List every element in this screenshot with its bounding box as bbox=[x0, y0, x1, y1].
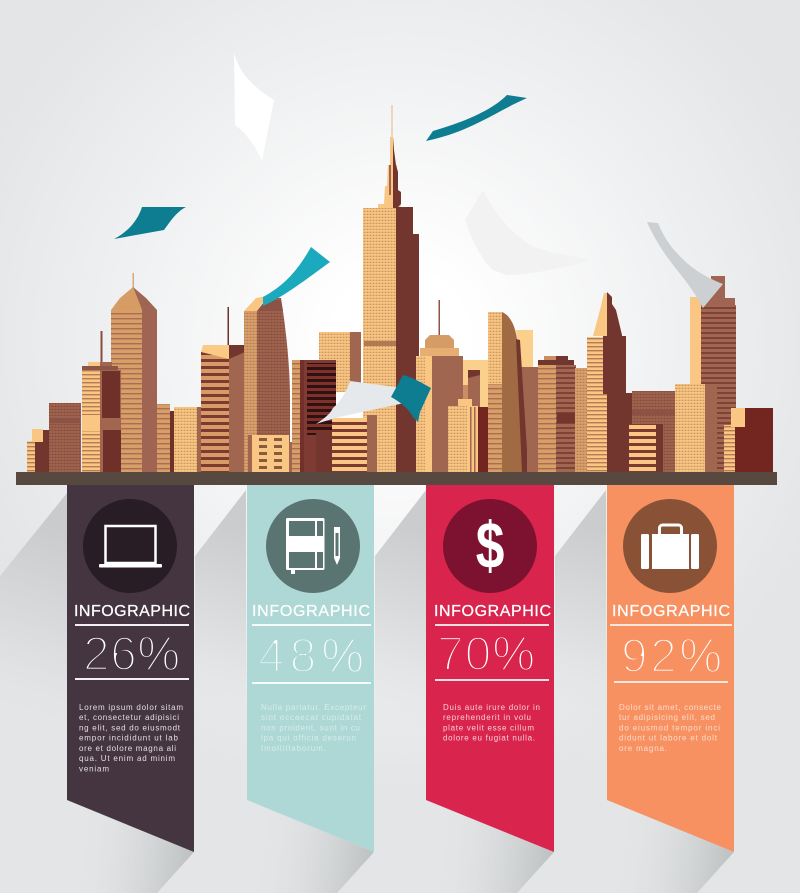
slanted roof tower bbox=[201, 307, 248, 472]
sail shaped tower bbox=[488, 312, 533, 472]
body text: ore magna. bbox=[619, 744, 667, 753]
body text: plate velit esse cillum bbox=[443, 724, 534, 732]
body text: Duis aute irure dolor in bbox=[443, 703, 540, 712]
body text: do eiusmod tempor inci bbox=[619, 724, 720, 732]
panel: ribbon 1 bbox=[67, 485, 194, 852]
heading: INFOGRAPHIC bbox=[252, 603, 370, 620]
narrow grid block bbox=[575, 368, 587, 472]
body text: qua. Ut enim ad minim bbox=[79, 754, 175, 763]
icon: laptop bbox=[83, 499, 177, 593]
flying paper: grey sheet bbox=[647, 222, 723, 308]
body text: et, consectetur adipisici bbox=[79, 713, 179, 722]
capped office block bbox=[533, 356, 576, 472]
right grid tower back bbox=[632, 391, 675, 472]
back grid tower bbox=[319, 332, 361, 392]
small tan building bbox=[157, 404, 174, 472]
shelf bbox=[16, 472, 777, 485]
tall right tower bbox=[690, 276, 736, 472]
heading: INFOGRAPHIC bbox=[74, 603, 190, 620]
panel: ribbon 4 bbox=[607, 485, 734, 852]
pyramid roof tower bbox=[111, 273, 157, 472]
body text: Lorem ipsum dolor sitam bbox=[79, 703, 183, 712]
panel: ribbon 2 bbox=[247, 485, 374, 852]
icon: notebook and pencil bbox=[266, 499, 360, 593]
pointed crown tower bbox=[587, 292, 632, 472]
percentage: 48% bbox=[258, 630, 364, 683]
percentage: 92% bbox=[621, 630, 722, 683]
panel: ribbon 3 bbox=[426, 485, 554, 852]
icon: briefcase bbox=[623, 499, 717, 593]
flying paper: white sheet bbox=[234, 53, 274, 161]
body text: ore et dolore magna ali bbox=[79, 744, 176, 753]
body text: non proident, sunt in cu bbox=[261, 724, 360, 732]
long shadows behind ribbons bbox=[0, 490, 734, 893]
body text: veniam bbox=[79, 764, 109, 774]
body text: reprehenderit in volu bbox=[443, 713, 531, 722]
body text: ng elit, sed do eiusmodt bbox=[79, 724, 181, 732]
icon: dollar sign: $ bbox=[476, 508, 504, 582]
back light block bbox=[463, 360, 488, 472]
far left low block bbox=[27, 429, 49, 472]
body text: tur adipisicing elit, sed bbox=[619, 713, 715, 722]
flying paper: teal sheet over city bbox=[391, 375, 431, 422]
front small grid block bbox=[448, 399, 491, 472]
heading: INFOGRAPHIC bbox=[612, 603, 730, 620]
body text bbox=[619, 703, 722, 753]
heading: INFOGRAPHIC bbox=[434, 603, 551, 620]
body text bbox=[261, 703, 366, 753]
percentage: 26% bbox=[83, 628, 180, 681]
curved tower bbox=[244, 296, 296, 472]
flying paper: pale sheet over city bbox=[316, 381, 404, 424]
body text: Nulla pariatur. Excepteur bbox=[261, 703, 366, 712]
body text: sint occaecat cupidatat bbox=[261, 713, 362, 722]
percentage: 70% bbox=[437, 628, 535, 681]
body text bbox=[79, 703, 183, 774]
body text: Dolor sit amet, consecte bbox=[619, 703, 722, 712]
light grid block right bbox=[675, 384, 705, 472]
main skyscraper bbox=[363, 105, 419, 472]
far right low block bbox=[724, 408, 773, 472]
body text: tmollitlaborum. bbox=[261, 744, 326, 753]
domed tower bbox=[416, 300, 463, 472]
flying paper: bright teal strip bbox=[263, 247, 330, 306]
striped front block bbox=[629, 424, 663, 472]
body text: didunt ut labore et dolt bbox=[619, 734, 718, 742]
dark window tower bbox=[292, 360, 336, 472]
body text bbox=[443, 703, 540, 742]
stepped tower with dark windows bbox=[82, 331, 121, 472]
body text: empor incididunt ut lab bbox=[79, 734, 179, 742]
flying paper: dark teal sheet bbox=[114, 207, 186, 239]
front striped block bbox=[332, 415, 377, 472]
flying paper: dark teal strip bbox=[426, 95, 527, 141]
body text: dolore eu fugiat nulla. bbox=[443, 734, 535, 742]
brown block bbox=[49, 403, 81, 472]
light grid building bbox=[174, 407, 201, 472]
flying paper: faint white sheet bbox=[465, 190, 590, 275]
icon: dollar sign bbox=[443, 499, 537, 593]
body text: lpa qui officia deserun bbox=[261, 734, 356, 742]
skyline bbox=[27, 105, 773, 472]
